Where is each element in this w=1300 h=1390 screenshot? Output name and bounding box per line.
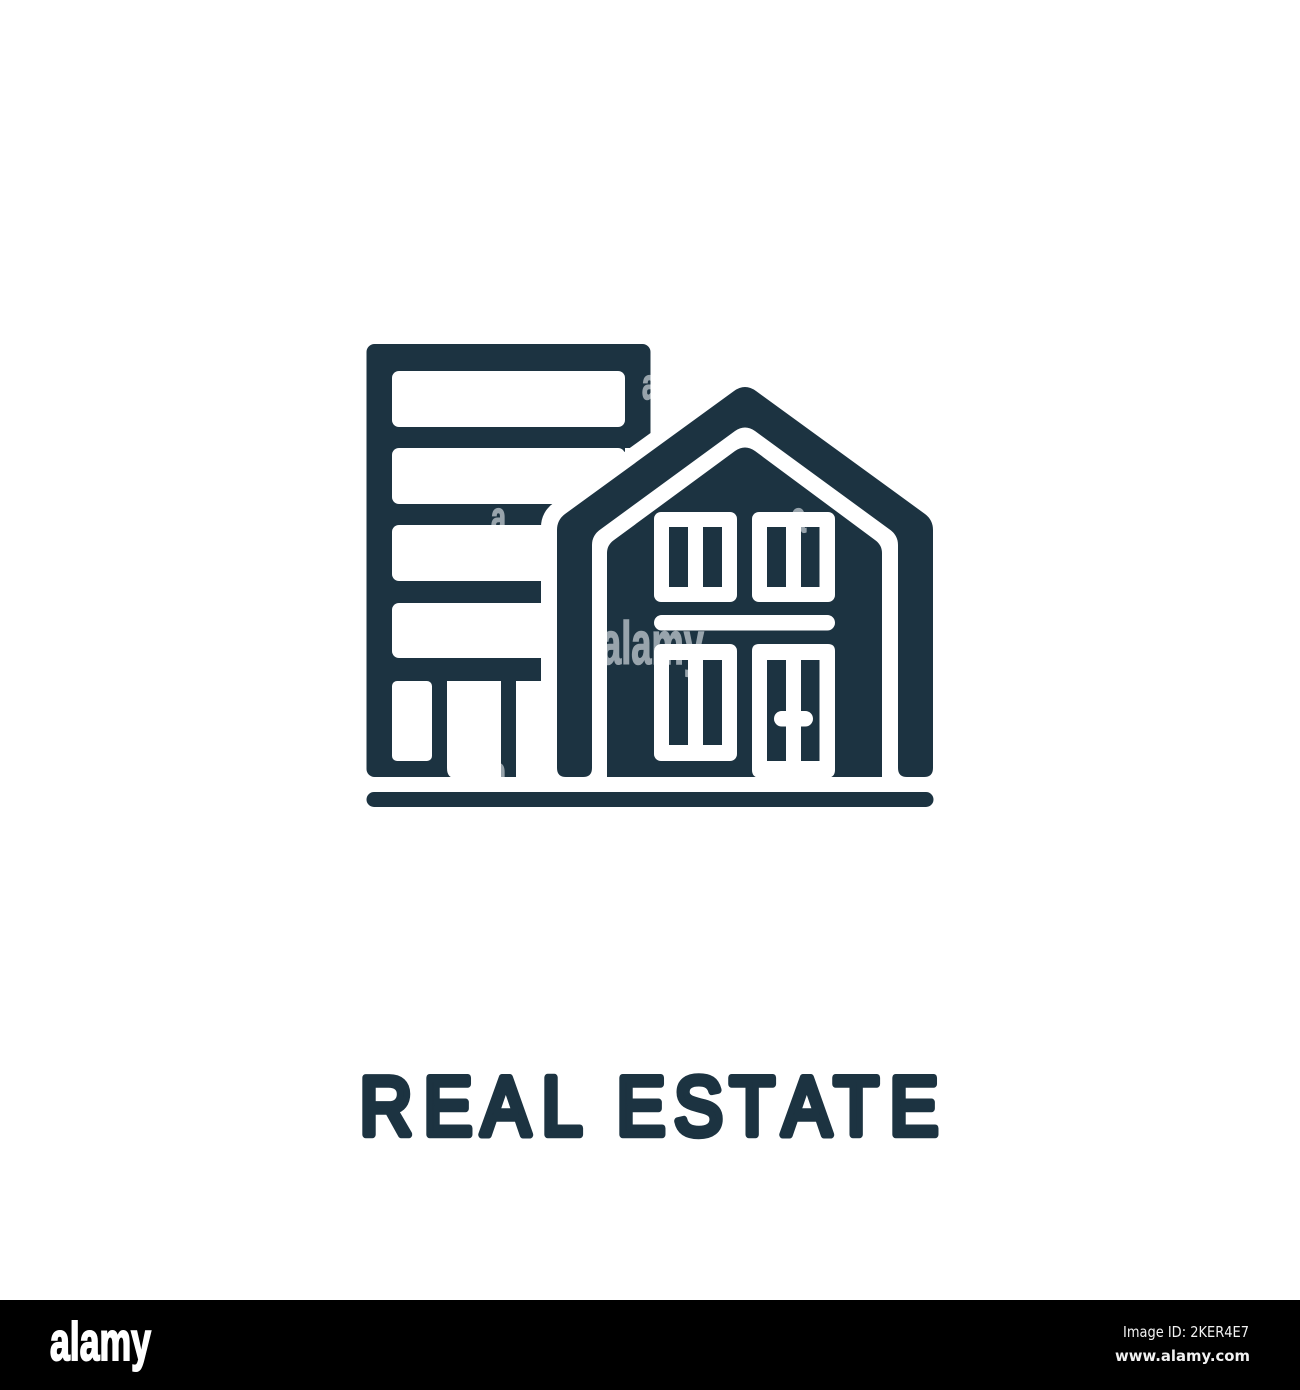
icon: ground line	[366, 792, 934, 807]
title: REAL ESTATE	[360, 1059, 938, 1153]
watermark: alamy	[601, 610, 704, 677]
door	[752, 644, 835, 778]
icon: house halo cut-out	[557, 388, 933, 778]
house inner wall	[607, 448, 882, 777]
window: top right	[752, 512, 835, 602]
website: www.alamy.com	[1115, 1347, 1250, 1365]
watermark: a	[491, 748, 506, 797]
watermark: a	[491, 493, 506, 542]
mask below icon baseline	[440, 777, 520, 792]
watermark: a	[791, 493, 806, 542]
footer bar	[0, 1300, 1300, 1390]
icon: office building	[366, 344, 651, 778]
window: bottom left	[654, 644, 737, 761]
house outer roof band	[557, 387, 933, 777]
window: top left	[654, 512, 737, 602]
footer logo: alamy	[50, 1312, 151, 1372]
icon: real estate buildings	[366, 344, 934, 807]
floor divider	[654, 615, 835, 630]
watermark	[491, 360, 806, 797]
icon: house	[557, 387, 933, 778]
watermark: a	[642, 360, 657, 409]
image id: Image ID: 2KER4E7	[1123, 1323, 1249, 1341]
